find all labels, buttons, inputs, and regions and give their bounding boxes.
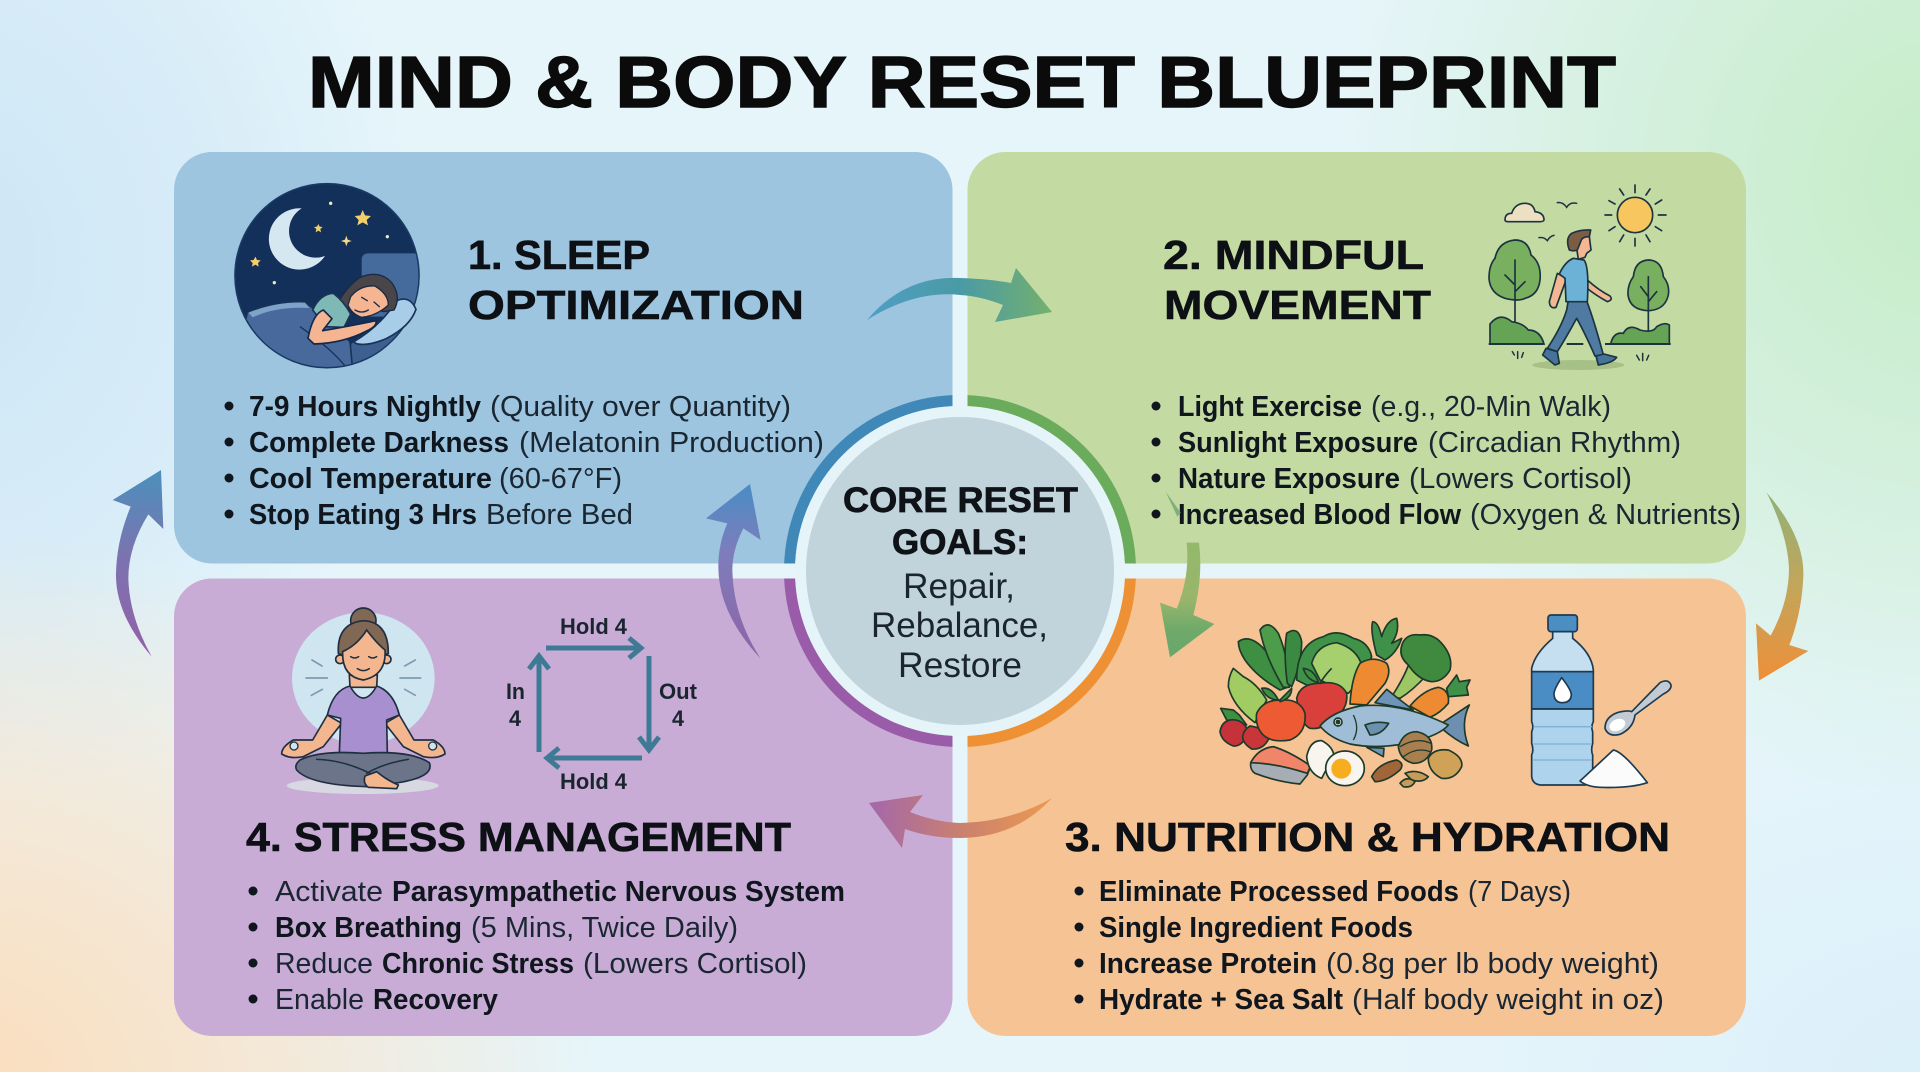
hub text: GOALS: [892, 523, 1028, 562]
hub text: Restore [898, 646, 1022, 685]
panel background [174, 152, 952, 564]
bullet list: (7 Days) [1468, 876, 1571, 908]
arrow: sleep to movement [867, 268, 1052, 322]
bullet list: Single Ingredient Foods [1099, 912, 1413, 944]
bullet list: (Half body weight in oz) [1352, 984, 1664, 1016]
bullet list: Enable [275, 984, 364, 1016]
bullet list: Increased Blood Flow [1178, 499, 1461, 531]
bullet list: Activate [275, 876, 383, 908]
arrow: nutrition to stress [869, 795, 1052, 848]
bullet list: Recovery [373, 984, 498, 1016]
bullet list: (e.g., 20-Min Walk) [1371, 391, 1611, 423]
label: hold top: Hold 4 [560, 614, 628, 639]
icon: water bottle and salt [1532, 615, 1671, 787]
bullet list: (Circadian Rhythm) [1428, 427, 1681, 459]
panel background [174, 578, 952, 1036]
label: in: 4 [509, 706, 522, 731]
bullet list [1074, 876, 1664, 1016]
bullet list: (60-67°F) [499, 463, 622, 495]
hub text: Repair, [903, 567, 1015, 606]
title: MIND & BODY RESET BLUEPRINT [308, 43, 1616, 123]
heading: 4. STRESS MANAGEMENT [246, 814, 791, 860]
bullet list: (Lowers Cortisol) [583, 948, 807, 980]
arrow: movement to nutrition (outer) [1756, 493, 1808, 681]
bullet list: Chronic Stress [382, 948, 574, 980]
bullet list: (Melatonin Production) [519, 427, 824, 459]
bullet list [1152, 391, 1741, 531]
bullet list [224, 391, 824, 531]
hub disc [800, 412, 1120, 730]
arrow: movement to nutrition (inner) [1160, 492, 1214, 657]
hub text [843, 481, 1078, 685]
heading [1163, 232, 1431, 328]
ring: sleep quadrant [784, 395, 952, 564]
bullet list: (5 Mins, Twice Daily) [471, 912, 738, 944]
panel: stress management [174, 578, 952, 1036]
bullet list: (Quality over Quantity) [490, 391, 791, 423]
bullet list: Before Bed [486, 499, 633, 531]
arrows: breathing square [529, 638, 659, 768]
heading: OPTIMIZATION [468, 282, 804, 328]
bullet list: Light Exercise [1178, 391, 1362, 423]
icon: person walking in nature [1489, 185, 1671, 370]
ring: nutrition quadrant [968, 578, 1136, 747]
panel background [968, 152, 1746, 564]
diagram: box breathing [506, 614, 698, 794]
panel: nutrition and hydration [968, 578, 1746, 1036]
bullet list: Parasympathetic Nervous System [392, 876, 845, 908]
icon: meditating person [282, 608, 445, 794]
label: out: Out [659, 679, 698, 704]
arrow: stress to sleep (outer) [113, 470, 163, 657]
icon: healthy food [1220, 618, 1470, 787]
arrow: stress to sleep (inner) [706, 484, 761, 659]
panel background [968, 578, 1746, 1036]
bullet list: Nature Exposure [1178, 463, 1400, 495]
label: out [659, 679, 698, 731]
bullet list: (Lowers Cortisol) [1409, 463, 1632, 495]
ring: movement quadrant [968, 395, 1136, 564]
bullet list [248, 876, 845, 1016]
bullet list: (Oxygen & Nutrients) [1470, 499, 1741, 531]
hub text: Rebalance, [871, 606, 1048, 645]
bullet list: Eliminate Processed Foods [1099, 876, 1459, 908]
bullet list: Complete Darkness [249, 427, 509, 459]
panel: sleep optimization [174, 152, 952, 564]
bullet list: Hydrate + Sea Salt [1099, 984, 1343, 1016]
label: in: In [506, 679, 525, 704]
bullet list: (0.8g per lb body weight) [1326, 948, 1659, 980]
heading: 2. MINDFUL [1163, 232, 1424, 278]
heading: MOVEMENT [1164, 282, 1431, 328]
heading: 1. SLEEP [468, 232, 650, 278]
bullet list: Box Breathing [275, 912, 462, 944]
ring: stress quadrant [784, 578, 952, 747]
label: in [506, 679, 525, 731]
heading: 3. NUTRITION & HYDRATION [1065, 814, 1670, 860]
center hub: core reset goals [790, 400, 1130, 742]
bullet list: Cool Temperature [249, 463, 492, 495]
bullet list: Reduce [275, 948, 373, 980]
panel: mindful movement [968, 152, 1746, 564]
label: hold bottom: Hold 4 [560, 769, 628, 794]
icon: sleeping person at night [233, 184, 423, 370]
hub text: CORE RESET [843, 481, 1078, 520]
bullet list: Increase Protein [1099, 948, 1317, 980]
bullet list: Sunlight Exposure [1178, 427, 1418, 459]
bullet list: Stop Eating 3 Hrs [249, 499, 477, 531]
heading [468, 232, 804, 328]
bullet list: 7-9 Hours Nightly [249, 391, 481, 423]
label: out: 4 [672, 706, 685, 731]
